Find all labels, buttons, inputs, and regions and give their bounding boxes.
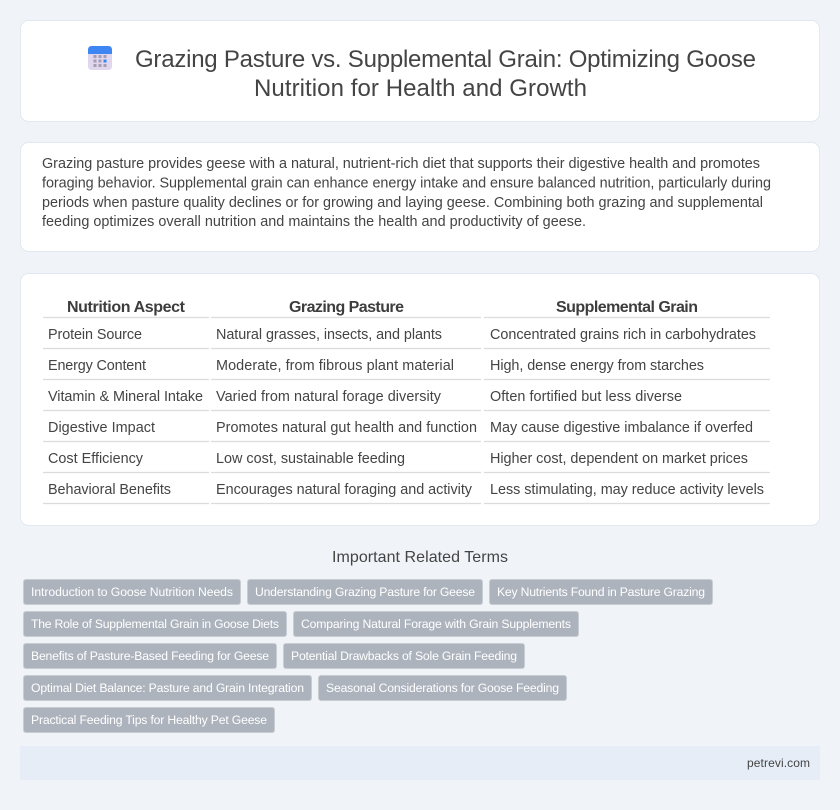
row: behavioral benefits	[48, 482, 764, 498]
tag	[284, 644, 524, 668]
intro paragraph: periods when pasture quality declines or for growing and laying geese. Combining both grazing and supplemental	[42, 195, 763, 211]
tag: Comparing Natural Forage with Grain Supplements	[301, 617, 571, 631]
tag	[24, 644, 276, 668]
row: vitamin and mineral intake: Varied from natural forage diversity	[216, 389, 442, 405]
tag	[24, 676, 312, 700]
row: protein source	[48, 327, 756, 343]
row: vitamin and mineral intake: Vitamin & Mineral Intake	[48, 389, 203, 405]
footer	[20, 746, 820, 780]
tag: Practical Feeding Tips for Healthy Pet Geese	[31, 713, 267, 727]
row: protein source: Natural grasses, insects, and plants	[216, 327, 442, 343]
table header: Nutrition Aspect	[67, 299, 186, 316]
row: digestive impact: Promotes natural gut health and function	[216, 420, 477, 436]
tag: Benefits of Pasture-Based Feeding for Geese	[31, 649, 269, 663]
tag	[24, 580, 240, 604]
intro paragraph: feeding optimizes overall nutrition and maintains the health and productivity of geese.	[42, 214, 586, 230]
panel: introduction text	[20, 142, 820, 252]
row: protein source: Concentrated grains rich in carbohydrates	[490, 327, 756, 343]
table header: Grazing Pasture	[289, 299, 404, 316]
tag: Seasonal Considerations for Goose Feeding	[326, 681, 559, 695]
row: vitamin and mineral intake: Often fortified but less diverse	[490, 389, 682, 405]
table header	[67, 299, 698, 316]
footer: petrevi.com	[747, 756, 810, 770]
row: digestive impact: May cause digestive imbalance if overfed	[490, 420, 753, 436]
row: energy content: Energy Content	[48, 358, 146, 374]
related terms tags	[24, 580, 712, 732]
row: cost efficiency: Low cost, sustainable feeding	[216, 451, 405, 467]
tag: Potential Drawbacks of Sole Grain Feeding	[291, 649, 517, 663]
intro paragraph: Grazing pasture provides geese with a natural, nutrient-rich diet that supports their digestive health and promotes	[42, 156, 760, 172]
title: Nutrition for Health and Growth	[254, 75, 587, 102]
tag: Key Nutrients Found in Pasture Grazing	[497, 585, 705, 599]
tag: Introduction to Goose Nutrition Needs	[31, 585, 233, 599]
row: cost efficiency	[48, 451, 748, 467]
tag	[24, 708, 274, 732]
title	[135, 46, 756, 102]
row: protein source: Protein Source	[48, 327, 142, 343]
table header: Supplemental Grain	[556, 299, 698, 316]
tag	[248, 580, 482, 604]
heading: important related terms: Important Related Terms	[332, 549, 508, 566]
tag	[24, 612, 286, 636]
title: Grazing Pasture vs. Supplemental Grain: Optimizing Goose	[135, 46, 756, 73]
tag: The Role of Supplemental Grain in Goose Diets	[31, 617, 279, 631]
row: energy content: High, dense energy from starches	[490, 358, 704, 374]
row: energy content: Moderate, from fibrous plant material	[216, 358, 454, 374]
row: digestive impact	[48, 420, 753, 436]
row: behavioral benefits: Less stimulating, may reduce activity levels	[490, 482, 764, 498]
tag	[294, 612, 578, 636]
tag	[490, 580, 712, 604]
intro paragraph	[42, 156, 771, 230]
icon: calendar	[88, 46, 112, 70]
row: digestive impact: Digestive Impact	[48, 420, 155, 436]
row: energy content	[48, 358, 704, 374]
row: behavioral benefits: Behavioral Benefits	[48, 482, 171, 498]
row: behavioral benefits: Encourages natural foraging and activity	[216, 482, 473, 498]
panel: title header	[20, 20, 820, 122]
row: cost efficiency: Higher cost, dependent on market prices	[490, 451, 748, 467]
row: vitamin and mineral intake	[48, 389, 682, 405]
tag: Understanding Grazing Pasture for Geese	[255, 585, 475, 599]
row: cost efficiency: Cost Efficiency	[48, 451, 144, 467]
tag: Optimal Diet Balance: Pasture and Grain Integration	[31, 681, 304, 695]
tag	[318, 676, 566, 700]
panel: comparison table	[20, 274, 820, 526]
intro paragraph: foraging behavior. Supplemental grain can enhance energy intake and ensure balanced nutrition, particularly during	[42, 176, 771, 192]
